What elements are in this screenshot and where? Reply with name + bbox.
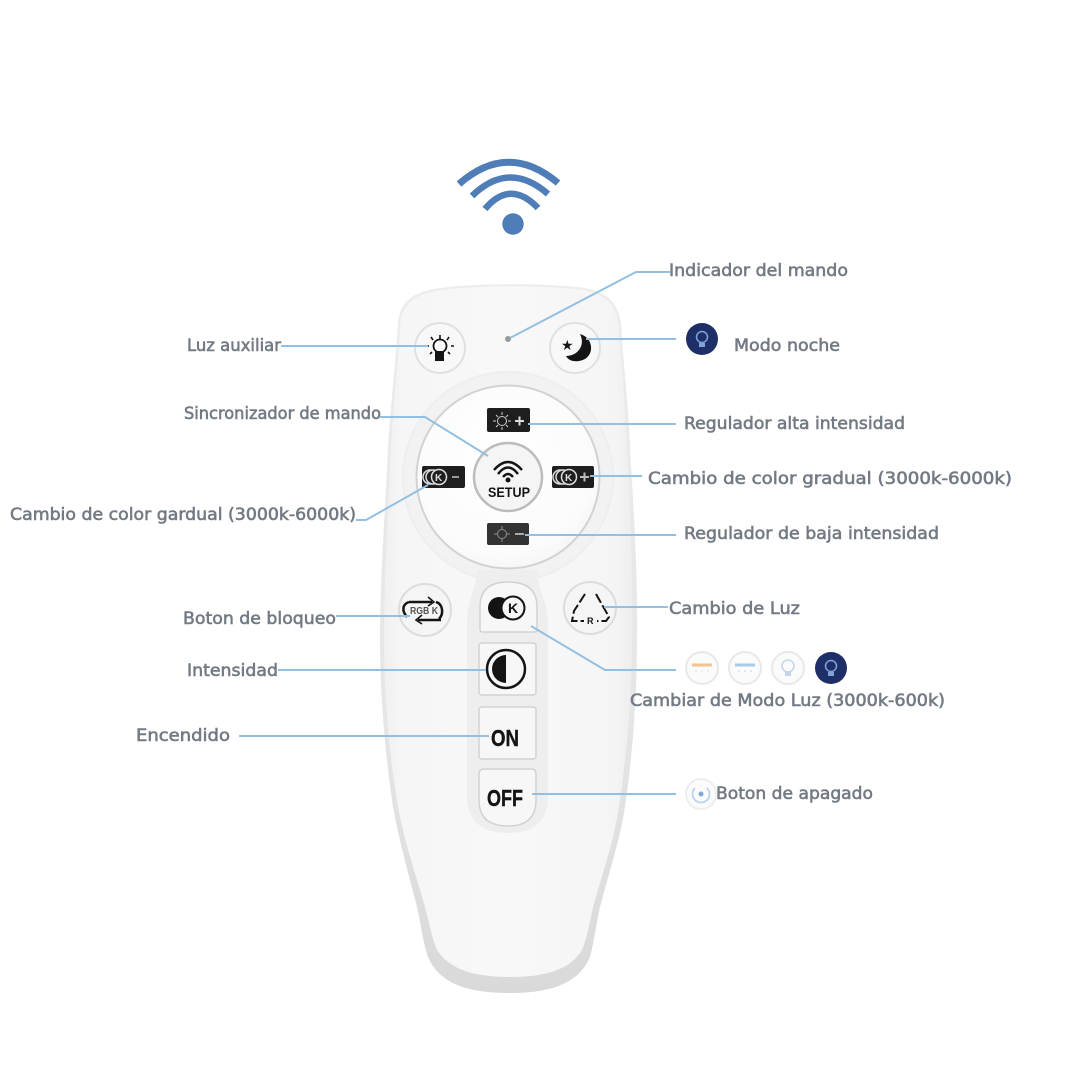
icons: light modes bbox=[686, 652, 847, 684]
label: Sincronizador de mando: Sincronizador de mando bbox=[184, 404, 381, 424]
button: lock bbox=[399, 584, 451, 636]
button: on bbox=[479, 707, 536, 759]
button: on: ON bbox=[491, 725, 519, 751]
button: colour mode bbox=[480, 582, 537, 632]
label: Cambio de Luz: Cambio de Luz bbox=[669, 599, 800, 619]
button: off bbox=[479, 769, 536, 826]
button: setup: SETUP bbox=[488, 484, 530, 500]
button: colour down: K bbox=[435, 473, 443, 484]
button: setup bbox=[474, 443, 542, 511]
button: colour up: K bbox=[565, 473, 573, 484]
label: Cambio de color gradual: Cambio de color gradual (3000k-6000k) bbox=[648, 469, 1012, 489]
button: night mode bbox=[550, 323, 600, 373]
leader lines bbox=[239, 272, 676, 794]
button: off: OFF bbox=[487, 785, 523, 811]
button: light change: R bbox=[587, 616, 594, 626]
remote control bbox=[380, 284, 637, 993]
d-pad bbox=[416, 386, 600, 568]
label: Modo noche: Modo noche bbox=[734, 336, 840, 356]
button: brightness down bbox=[487, 523, 529, 545]
button: colour down bbox=[422, 466, 465, 488]
button: colour up bbox=[552, 466, 594, 488]
wifi icon bbox=[459, 162, 558, 235]
label: Intensidad: Intensidad bbox=[187, 661, 278, 681]
label: Boton de bloqueo: Boton de bloqueo bbox=[183, 609, 336, 629]
icon: power off bbox=[686, 779, 716, 809]
label: Luz auxiliar: Luz auxiliar bbox=[187, 336, 281, 356]
lower button channel bbox=[467, 570, 548, 833]
label: Regulador alta intensidad: Regulador alta intensidad bbox=[684, 414, 905, 434]
remote rim bbox=[380, 284, 637, 993]
button: colour mode: K bbox=[508, 600, 518, 616]
button: auxiliary light bbox=[415, 323, 465, 373]
label: Regulador de baja intensidad: Regulador de baja intensidad bbox=[684, 524, 939, 544]
label: Indicador del mando: Indicador del mando bbox=[669, 261, 848, 281]
label: Boton de apagado: Boton de apagado bbox=[716, 784, 873, 804]
label: Encendido: Encendido bbox=[136, 726, 230, 746]
control ring bbox=[403, 372, 613, 582]
indicator light bbox=[505, 336, 511, 342]
label: Cambio de color gardual: Cambio de color gardual (3000k-6000k) bbox=[10, 505, 356, 525]
label: Cambiar de Modo Luz: Cambiar de Modo Luz (3000k-600k) bbox=[630, 691, 945, 711]
button: night mode: ★ bbox=[561, 337, 574, 353]
icon: night mode bulb bbox=[686, 323, 718, 355]
button: light change bbox=[564, 582, 616, 634]
button: lock: RGB K bbox=[410, 606, 439, 617]
button: brightness up bbox=[487, 408, 530, 432]
button: intensity bbox=[479, 643, 536, 695]
remote face bbox=[384, 286, 632, 977]
